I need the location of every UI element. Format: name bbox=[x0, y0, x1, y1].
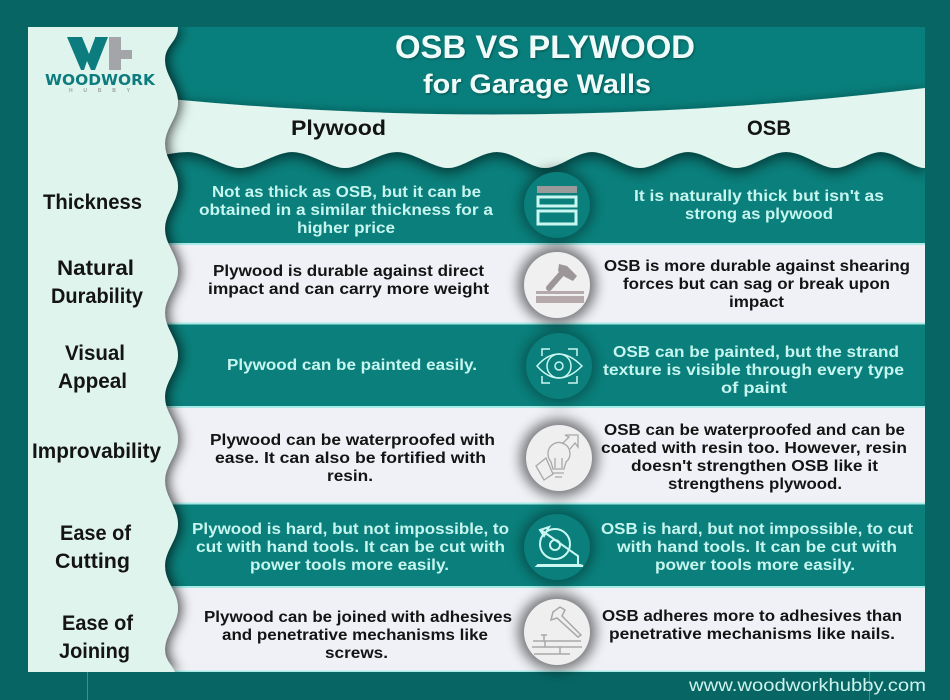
label: Ease of Cutting: Cutting bbox=[55, 550, 130, 573]
plywood improvability bbox=[210, 432, 495, 485]
title line 1: OSB VS PLYWOOD bbox=[395, 29, 695, 65]
plywood thickness: obtained in a similar thickness for a bbox=[199, 202, 493, 219]
logo bbox=[45, 37, 156, 94]
OSB cutting: power tools more easily. bbox=[655, 557, 855, 574]
OSB thickness bbox=[634, 188, 884, 223]
label: Ease of Joining: Ease of bbox=[62, 612, 134, 635]
plywood thickness: higher price bbox=[297, 220, 395, 237]
row 6 band: ease of joining bbox=[165, 588, 925, 670]
label: Visual Appeal bbox=[58, 342, 127, 393]
OSB improvability: doesn't strengthen OSB like it bbox=[631, 458, 879, 475]
label: Ease of Joining bbox=[59, 612, 134, 663]
OSB cutting: with hand tools. It can be cut with bbox=[616, 539, 897, 556]
plywood durability bbox=[208, 263, 490, 298]
label: Thickness: Thickness bbox=[43, 191, 142, 214]
column heading: Plywood: Plywood bbox=[291, 117, 386, 140]
OSB durability: forces but can sag or break upon bbox=[623, 276, 890, 293]
OSB improvability: strengthens plywood. bbox=[668, 476, 842, 493]
OSB visual appeal bbox=[603, 344, 904, 397]
icon: light bulb with arrow bbox=[520, 419, 598, 497]
plywood visual appeal: Plywood can be painted easily. bbox=[227, 357, 477, 374]
OSB visual appeal: texture is visible through every type bbox=[603, 362, 904, 379]
OSB durability: impact bbox=[729, 294, 785, 311]
OSB visual appeal: of paint bbox=[721, 380, 788, 397]
OSB durability bbox=[604, 258, 910, 311]
OSB improvability: OSB can be waterproofed and can be bbox=[604, 422, 905, 439]
OSB column text bbox=[601, 188, 914, 643]
footer URL: www.woodworkhubby.com bbox=[688, 675, 926, 695]
OSB joining bbox=[602, 608, 902, 643]
title line 2: for Garage Walls bbox=[423, 69, 651, 99]
label: Visual Appeal: Appeal bbox=[58, 370, 127, 393]
plywood durability: impact and can carry more weight bbox=[208, 281, 490, 298]
icon: thickness layers bbox=[520, 168, 594, 242]
icon: eye bbox=[522, 329, 596, 403]
label: Ease of Cutting: Ease of bbox=[60, 522, 132, 545]
row 4 band: improvability bbox=[165, 408, 925, 502]
plywood improvability: Plywood can be waterproofed with bbox=[210, 432, 495, 449]
plywood cutting: cut with hand tools. It can be cut with bbox=[196, 539, 505, 556]
logo mark W bbox=[67, 37, 108, 70]
OSB joining: OSB adheres more to adhesives than bbox=[602, 608, 902, 625]
label: Natural Durability: Durability bbox=[51, 285, 143, 308]
OSB cutting: OSB is hard, but not impossible, to cut bbox=[601, 521, 914, 538]
OSB cutting bbox=[601, 521, 914, 574]
row 1 band: thickness bbox=[165, 167, 925, 243]
plywood durability: Plywood is durable against direct bbox=[213, 263, 485, 280]
label: Ease of Cutting bbox=[55, 522, 132, 573]
OSB visual appeal: OSB can be painted, but the strand bbox=[613, 344, 899, 361]
OSB thickness: strong as plywood bbox=[685, 206, 833, 223]
logo mark H bbox=[109, 37, 132, 70]
column header wave bbox=[150, 88, 925, 168]
plywood joining: and penetrative mechanisms like bbox=[222, 627, 488, 644]
plywood improvability: resin. bbox=[327, 468, 373, 485]
icon: circular saw bbox=[520, 510, 594, 584]
row 2 band: natural durability bbox=[165, 245, 925, 322]
plywood joining: screws. bbox=[325, 645, 388, 662]
OSB improvability: coated with resin too. However, resin bbox=[601, 440, 907, 457]
OSB durability: OSB is more durable against shearing bbox=[604, 258, 910, 275]
plywood cutting bbox=[192, 521, 509, 574]
plywood joining bbox=[204, 609, 512, 662]
plywood cutting: power tools more easily. bbox=[250, 557, 449, 574]
title bbox=[395, 29, 695, 99]
row 5 band: ease of cutting bbox=[165, 504, 925, 586]
label: Improvability: Improvability bbox=[32, 440, 161, 463]
plywood cutting: Plywood is hard, but not impossible, to bbox=[192, 521, 509, 538]
label: Natural Durability: Natural bbox=[57, 257, 134, 280]
row 3 band: visual appeal bbox=[165, 324, 925, 406]
plywood improvability: ease. It can also be fortified with bbox=[215, 450, 486, 467]
label: Visual Appeal: Visual bbox=[65, 342, 125, 365]
plywood thickness: Not as thick as OSB, but it can be bbox=[212, 184, 481, 201]
label: Natural Durability bbox=[51, 257, 143, 308]
logo wordmark: WOODWORK bbox=[45, 71, 156, 89]
row labels bbox=[32, 191, 161, 663]
logo subtitle: HUBBY bbox=[69, 88, 131, 94]
plywood thickness bbox=[199, 184, 493, 237]
column heading: OSB: OSB bbox=[747, 117, 791, 140]
OSB thickness: It is naturally thick but isn't as bbox=[634, 188, 884, 205]
header band bbox=[165, 27, 925, 114]
plywood column text bbox=[192, 184, 512, 662]
icon: hammer on board bbox=[518, 246, 596, 324]
icon: hammer and nail bbox=[518, 593, 596, 671]
label: Ease of Joining: Joining bbox=[59, 640, 130, 663]
left label panel bbox=[28, 27, 178, 672]
OSB improvability bbox=[601, 422, 907, 493]
plywood joining: Plywood can be joined with adhesives bbox=[204, 609, 512, 626]
OSB joining: penetrative mechanisms like nails. bbox=[609, 626, 895, 643]
